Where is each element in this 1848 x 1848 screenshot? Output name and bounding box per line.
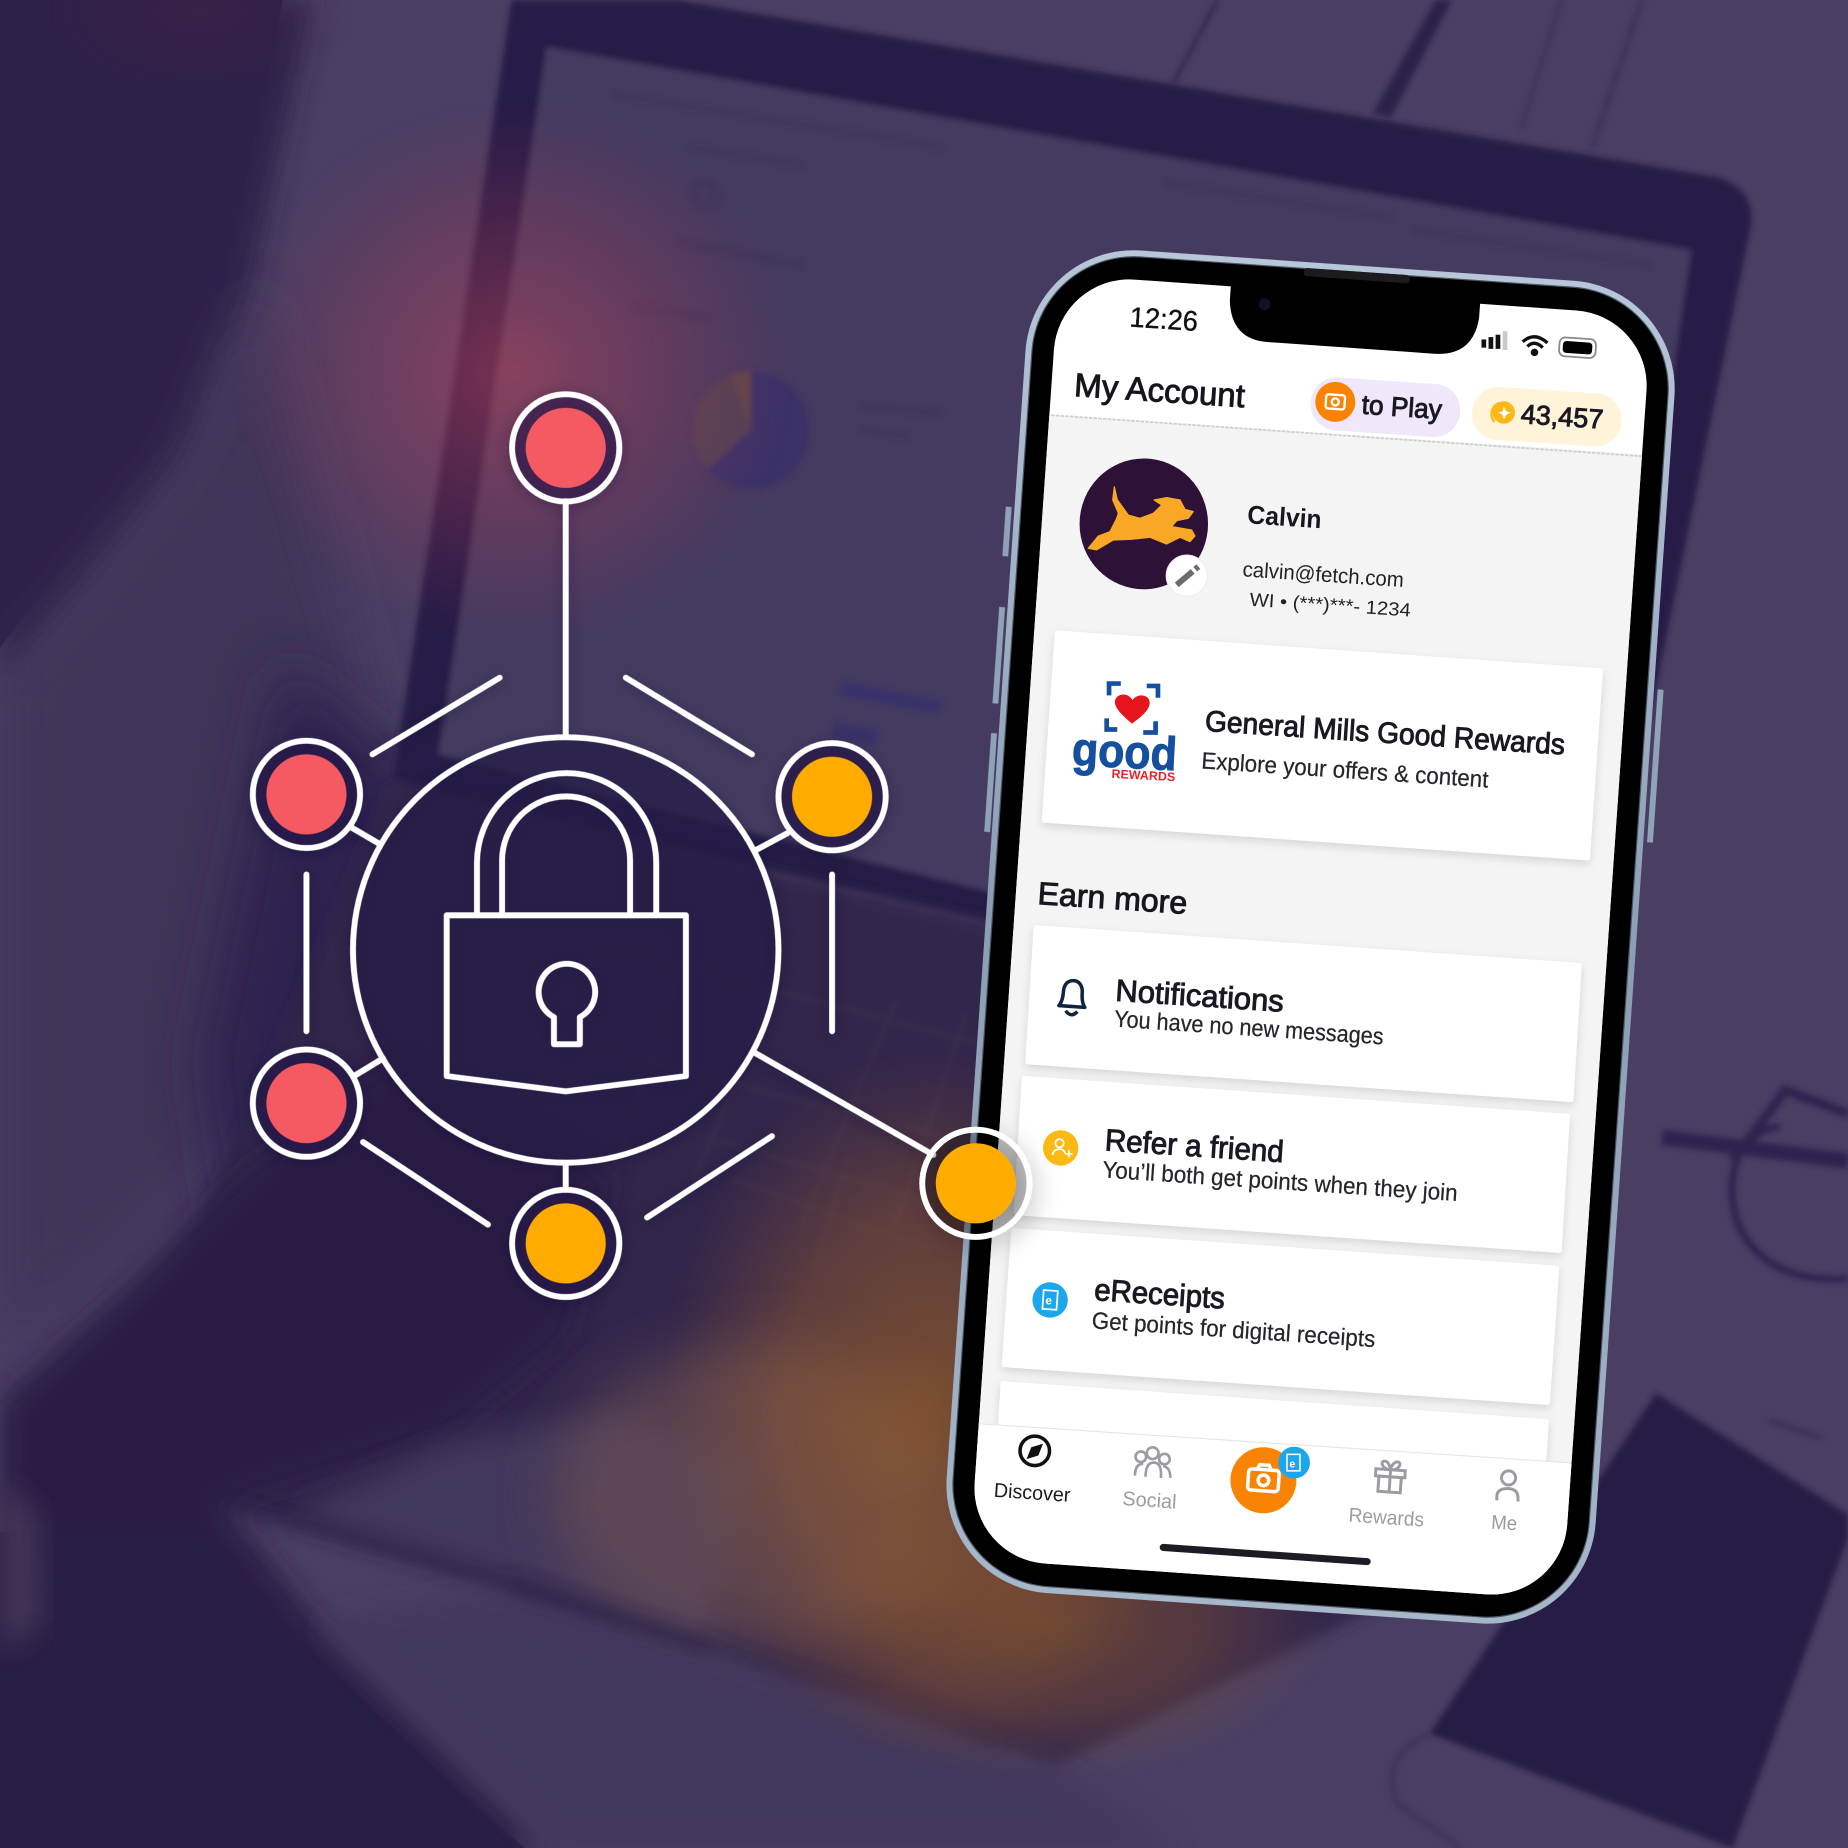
notifications card: You have no new messages (1113, 1006, 1384, 1049)
account header: 12:26 (1129, 301, 1199, 337)
edit pencil (1166, 555, 1207, 596)
good rewards card: Explore your offers & content (1201, 747, 1490, 793)
node: upper right amber (778, 743, 886, 850)
to play pill (1309, 376, 1462, 439)
points pill (1470, 385, 1623, 448)
tab: me: Me (1491, 1512, 1518, 1535)
good rewards logo: REWARDS (1111, 767, 1176, 784)
good rewards logo (1071, 684, 1178, 784)
ereceipts card: eReceipts (1093, 1273, 1226, 1316)
padlock icon (447, 773, 686, 1091)
dog logo (1088, 487, 1195, 550)
notch and status icons (1227, 263, 1596, 358)
refer a friend card (1016, 1078, 1568, 1250)
icon: add friend (1043, 1130, 1078, 1166)
screen content (974, 307, 1642, 1594)
ereceipts card: Get points for digital receipts (1091, 1307, 1376, 1352)
notifications card (1028, 928, 1579, 1100)
node: lower left red (253, 1050, 360, 1157)
profile details: WI • (***)***- 1234 (1249, 589, 1412, 620)
profile details: Calvin (1247, 501, 1322, 534)
refer a friend card: Refer a friend (1104, 1123, 1285, 1169)
refer a friend card: You’ll both get points when they join (1102, 1156, 1459, 1206)
phone mockup (931, 243, 1682, 1674)
earn more heading: Earn more (1037, 875, 1188, 921)
desk items top right (1174, 0, 1642, 147)
hub circle (353, 737, 778, 1163)
icon: bell (1058, 980, 1087, 1016)
side buttons (984, 507, 1664, 843)
tab: me (1491, 1471, 1518, 1535)
profile details (1242, 501, 1412, 620)
screen contents (613, 94, 1650, 745)
node: top red (512, 394, 619, 501)
red and orange glows (230, 101, 796, 644)
connector lines (306, 501, 933, 1225)
icon: wifi (1523, 337, 1547, 355)
icon: ereceipt (1032, 1282, 1068, 1318)
points pill: 43,457 (1520, 398, 1604, 435)
tab: social: Social (1122, 1488, 1177, 1514)
account header (1073, 301, 1623, 448)
tab bar (931, 1423, 1585, 1674)
tab: social (1122, 1447, 1177, 1514)
profile avatar (1080, 458, 1208, 596)
node: bottom amber (512, 1190, 619, 1297)
good rewards card (1044, 633, 1600, 858)
desk phone (1430, 1393, 1848, 1848)
notifications card: Notifications (1114, 974, 1285, 1019)
to play pill: to Play (1361, 389, 1443, 425)
home indicator (1163, 1547, 1367, 1562)
tab: camera button: e (1289, 1458, 1295, 1470)
profile details: calvin@fetch.com (1242, 558, 1405, 592)
partial next card (995, 1384, 1546, 1556)
icon: signal (1481, 331, 1507, 350)
icon: ereceipt: e (1045, 1295, 1052, 1308)
good rewards card: General Mills Good Rewards (1204, 705, 1566, 762)
trackpad and laptop front (295, 1414, 754, 1644)
lock network diagram (253, 394, 933, 1297)
phone body (939, 243, 1682, 1631)
glasses (1662, 1090, 1848, 1279)
tab: camera button (1230, 1447, 1310, 1513)
tab: rewards (1348, 1460, 1425, 1532)
node: right amber over phone (922, 1130, 1029, 1237)
tab: discover (993, 1436, 1071, 1507)
account header: My Account (1073, 366, 1246, 414)
laptop base and keyboard (118, 783, 1579, 1768)
icon: battery (1559, 337, 1596, 358)
gray content area (943, 412, 1674, 1485)
dark hand and shadow (0, 1061, 613, 1848)
good rewards logo: good (1071, 722, 1178, 780)
tab: discover: Discover (993, 1480, 1071, 1507)
tab: rewards: Rewards (1348, 1505, 1425, 1532)
ereceipts card (1004, 1230, 1557, 1402)
node: upper left red (253, 741, 360, 848)
laptop with screen (392, 0, 1751, 1061)
